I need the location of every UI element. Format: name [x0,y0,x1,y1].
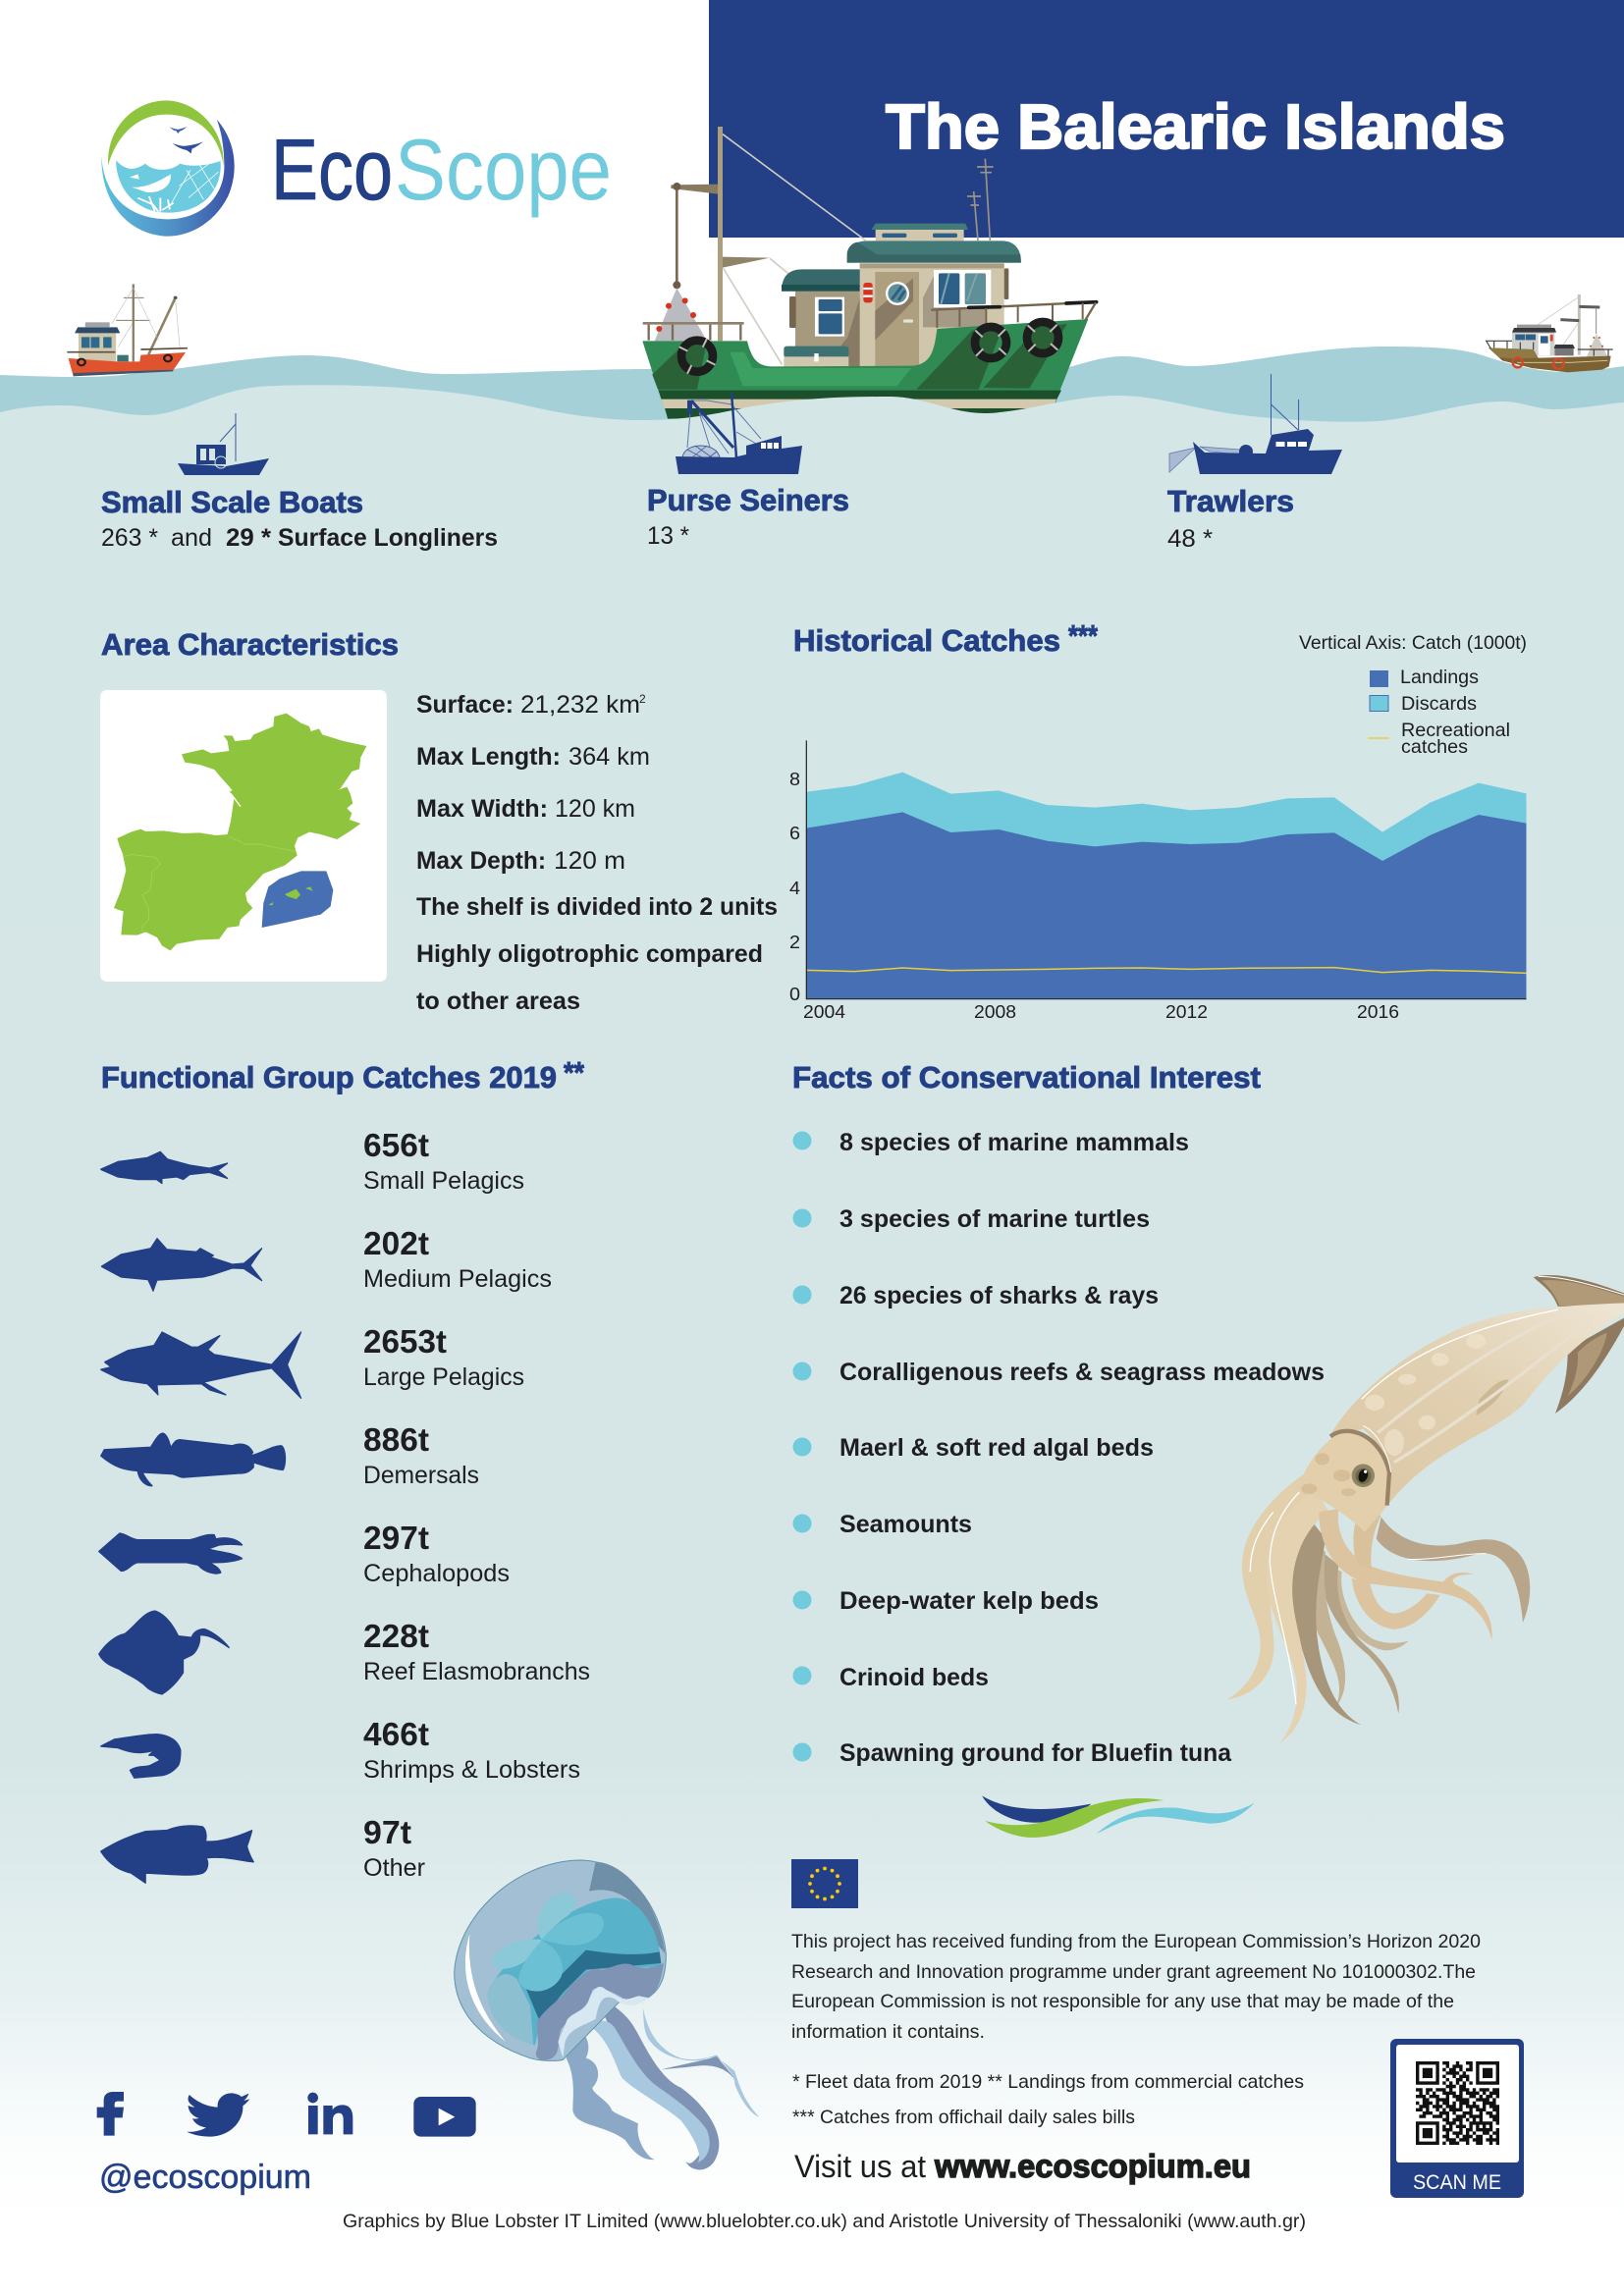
catch: large pelagics: 2653t [363,1323,447,1360]
text: funding statement [791,1931,1481,2043]
heading: purse seiners: Purse Seiners [647,483,849,517]
chart legend: Discards [1401,693,1477,715]
fish silhouettes [99,1151,301,1883]
catch: cephalopods: 297t [363,1520,429,1556]
heading: historical catches: Historical Catches [793,623,1060,658]
text: area facts: 120 m [554,847,625,875]
catch: demersals: Demersals [363,1462,479,1489]
catch: medium pelagics: 202t [363,1225,429,1261]
QR code card [1390,2039,1524,2198]
text: website: Visit us at [794,2149,926,2184]
red fishing boat [67,284,188,376]
text: funding statement: This project has received funding from the European Commission’s Horizon 2020 [791,1931,1481,1952]
rear cabin [782,269,861,366]
panel: facts of conservational interest [792,1060,1325,1767]
area chart: 2016 [1357,1002,1399,1022]
icon: facebook [97,2092,124,2136]
heading: small scale boats: Small Scale Boats [101,485,363,519]
jellyfish tentacles [567,1998,759,2169]
social links [97,2092,476,2196]
mast and rigging [671,127,866,365]
text: area facts: to other areas [416,988,580,1015]
catch: shrimps and lobsters: Shrimps & Lobsters [363,1756,580,1784]
facts list: 3 species of marine turtles [839,1205,1150,1233]
icon: medium pelagic [101,1239,262,1291]
title banner [709,0,1624,238]
text: area facts: The shelf is divided into 2 units [416,893,778,921]
icon: youtube [413,2097,476,2137]
text: area facts: Surface: [416,691,514,719]
facts list: Crinoid beds [839,1664,989,1691]
illustration: jellyfish [455,1860,759,2169]
panel: historical catches [789,618,1527,1022]
icon: shrimp [101,1735,181,1778]
logo emblem [101,100,235,237]
facts list: Spawning ground for Bluefin tuna [839,1739,1232,1767]
text: small scale boats count: 29 * [226,524,271,552]
panel: functional group catches [99,1055,590,1883]
main green fishing boat [642,127,1097,419]
text: small scale boats count [101,524,498,552]
facts list: Deep-water kelp beds [839,1587,1099,1615]
text: area facts [416,691,778,1015]
icon: trawler [1169,374,1342,474]
catch: reef elasmobranchs: 228t [363,1618,429,1654]
facts list: Seamounts [839,1511,972,1538]
text: small scale boats count: 263 * [101,524,158,552]
map: Balearic islands [268,886,313,905]
area chart [789,740,1526,1022]
text: small scale boats count: Surface Longliners [278,524,498,552]
area chart: 2012 [1165,1002,1208,1022]
icon: demersal [101,1433,286,1486]
icon: linkedin [307,2093,352,2134]
text: graphics credit: Graphics by Blue Lobster IT Limited (www.bluelobter.co.uk) and Aristotle University of Thessaloniki (www.auth.gr) [343,2211,1306,2232]
main cabin [860,263,1008,366]
icon: cephalopod [99,1533,243,1574]
area chart: 2 [789,933,800,952]
catch: cephalopods: Cephalopods [363,1560,510,1587]
text: footnotes: *** Catches from offichail daily sales bills [792,2107,1135,2128]
fleet: purse seiners [647,393,849,550]
area chart: 6 [789,824,800,843]
catch: other: Other [363,1854,425,1882]
icon: reef elasmobranch [99,1611,229,1694]
icon: other fish [101,1826,253,1883]
icon: large pelagic [101,1332,301,1398]
icon: small pelagic [101,1151,228,1184]
heading: functional group catches: Functional Group Catches 2019 [101,1060,557,1095]
icon: small boat [178,413,269,475]
catch: shrimps and lobsters [363,1716,580,1784]
chart legend [1368,667,1510,758]
catch: other: 97t [363,1814,411,1850]
heading: trawlers: Trawlers [1167,484,1294,518]
catch: demersals [363,1421,479,1489]
map panel [100,690,387,982]
catch: reef elasmobranchs: Reef Elasmobranchs [363,1658,590,1685]
net cone with floats [655,288,707,341]
text: area facts: Max Depth: [416,847,546,875]
title: The Balearic Islands [886,91,1505,162]
text: footnotes [792,2071,1304,2128]
text: purse seiners count: 13 * [647,522,689,550]
illustration: squid [1226,1275,1624,1743]
heading: functional group catches: ** [564,1055,585,1090]
text: funding statement: Research and Innovation programme under grant agreement No 101000302.The [791,1961,1476,1983]
catch: shrimps and lobsters: 466t [363,1716,429,1752]
catch: small pelagics [363,1127,524,1195]
icon: twitter [187,2093,249,2137]
text: funding statement: European Commission is not responsible for any use that may be made of the [791,1991,1454,2012]
fleet: small scale boats [101,413,498,552]
catch: small pelagics: Small Pelagics [363,1167,524,1195]
heading: historical catches: *** [1068,618,1099,653]
wave: back sea [0,347,1624,491]
heading: area characteristics: Area Characteristics [101,627,399,662]
text: area facts: 2 [639,692,646,706]
cabin roof and antennas [847,159,1021,263]
facts list: Coralligenous reefs & seagrass meadows [839,1359,1325,1386]
icon: purse seiner [676,393,802,474]
catch: large pelagics [363,1323,524,1391]
text: area facts: 364 km [568,743,650,771]
catch: medium pelagics [363,1225,552,1293]
catch: large pelagics: Large Pelagics [363,1363,524,1391]
chart legend: Landings [1400,667,1479,688]
catch: medium pelagics: Medium Pelagics [363,1265,552,1293]
area chart: 2008 [974,1002,1016,1022]
chart legend: catches [1401,736,1468,758]
bullets [793,1131,811,1761]
text: area facts: Max Length: [416,743,561,771]
facts list [839,1129,1325,1767]
text: funding statement: information it contains. [791,2021,985,2043]
text: area facts: Highly oligotrophic compared [416,940,763,968]
jellyfish bell [455,1860,666,2060]
deck rail [931,302,1097,328]
QR code [1416,2061,1499,2145]
text: vertical axis caption: Vertical Axis: Catch (1000t) [1299,632,1527,654]
fleet: trawlers [1167,374,1342,553]
catch: demersals: 886t [363,1421,429,1458]
logo wordmark: Scope [395,121,612,218]
text: footnotes: * Fleet data from 2019 ** Landings from commercial catches [792,2071,1304,2093]
area chart: 0 [789,985,800,1004]
text: website: www.ecoscopium.eu [934,2148,1251,2184]
catch: other [363,1814,425,1882]
jellyfish petals [493,1893,604,1992]
catch: small pelagics: 656t [363,1127,429,1163]
map: France and Iberia [114,714,366,950]
panel: area characteristics [100,627,778,1015]
facts list: 26 species of sharks & rays [839,1282,1159,1309]
brown trawler boat [1486,294,1613,372]
facts list: Maerl & soft red algal beds [839,1434,1154,1462]
text: area facts: Max Width: [416,795,548,823]
text: scan me: SCAN ME [1413,2171,1501,2194]
EU flag [791,1859,858,1908]
map: Balearic unit [262,871,333,928]
facts list: 8 species of marine mammals [839,1129,1189,1156]
heading: facts: Facts of Conservational Interest [792,1060,1261,1095]
area chart: 8 [789,770,800,789]
hull [642,319,1088,419]
logo mark: three waves [982,1795,1255,1838]
text: social handle: @ecoscopium [99,2159,311,2196]
text: trawlers count: 48 * [1167,525,1213,553]
text: website [794,2148,1251,2184]
logo wordmark: Eco [271,121,393,218]
area chart: 2004 [803,1002,845,1022]
lifebuoys [679,322,1058,374]
catch: cephalopods [363,1520,510,1587]
logo: EcoScope [101,100,612,237]
catch: reef elasmobranchs [363,1618,590,1685]
text: small scale boats count: and [171,524,212,552]
text: area facts: 120 km [555,795,635,823]
chart legend: Recreational [1401,720,1510,741]
area chart: 4 [789,879,800,898]
text: area facts: 21,232 km [520,691,640,719]
